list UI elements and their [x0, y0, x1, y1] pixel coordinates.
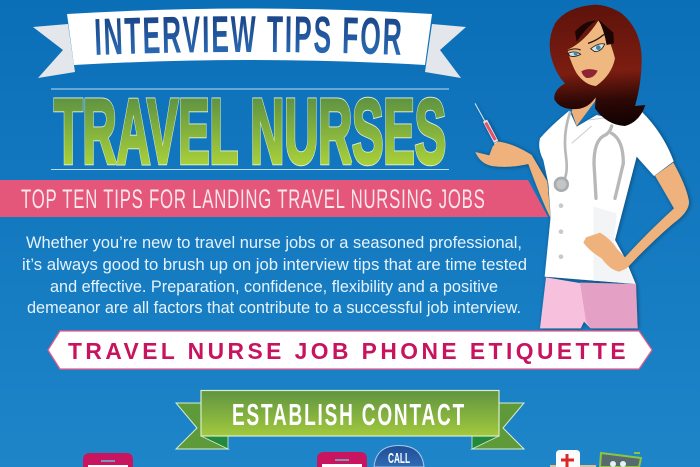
eyes and brows: [567, 34, 605, 56]
heading: Travel Nurses: [51, 81, 449, 183]
stethoscope: [555, 113, 623, 198]
green ribbon: Establish Contact: [176, 390, 524, 449]
icon: call back badge: CALL: [388, 450, 410, 467]
face: [567, 21, 615, 86]
buttons: [559, 203, 563, 259]
icon: phone 2: [317, 452, 367, 467]
pants: [540, 277, 638, 328]
intro paragraph: demeanor are all factors that contribute to a successful job interview.: [27, 298, 521, 317]
neck: [572, 80, 596, 126]
icon: monitor: [600, 452, 641, 467]
intro paragraph: Whether you’re new to travel nurse jobs or a seasoned professional,: [26, 233, 522, 252]
green ribbon: Establish Contact: ESTABLISH CONTACT: [232, 397, 466, 432]
section banner: phone etiquette: TRAVEL NURSE JOB PHONE ETIQUETTE: [68, 338, 629, 364]
subtitle band: [0, 180, 548, 217]
intro paragraph: [22, 233, 527, 317]
collar: [572, 117, 608, 143]
uniform shading: [593, 207, 635, 283]
icon: phone 1: [83, 453, 133, 467]
intro paragraph: and effective. Preparation, confidence, flexibility and a positive: [50, 277, 498, 296]
syringe: [475, 103, 503, 152]
title ribbon: Interview Tips For: INTERVIEW TIPS FOR: [95, 16, 401, 55]
white uniform: [539, 111, 674, 284]
title ribbon: Interview Tips For: [33, 8, 466, 78]
left arm and hand: [475, 141, 551, 218]
subtitle band: TOP TEN TIPS FOR LANDING TRAVEL NURSING JOBS: [21, 184, 485, 214]
section banner: phone etiquette: [48, 331, 652, 369]
nurse illustration: [475, 5, 689, 328]
right arm and hand: [583, 163, 689, 272]
icon: call back badge: [374, 446, 424, 467]
hair: [550, 5, 645, 126]
intro paragraph: it’s always good to brush up on job interview tips that are time tested: [22, 255, 527, 274]
lips: [581, 69, 598, 78]
icon: medical kit: [550, 450, 596, 467]
dark hair fringe: [575, 19, 614, 45]
